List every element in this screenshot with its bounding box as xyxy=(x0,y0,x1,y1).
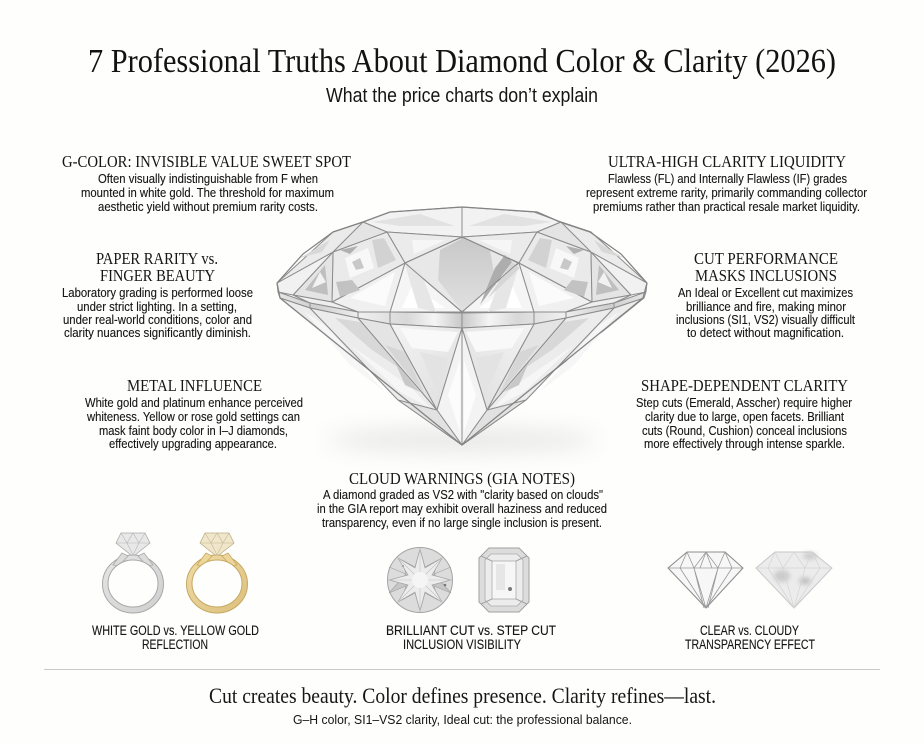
text block: cut performance: CUT PERFORMANCE xyxy=(694,249,838,268)
diamond shadow xyxy=(327,427,597,453)
text block: cut performance xyxy=(676,249,855,340)
icon: clear diamond xyxy=(668,552,743,608)
label: transparency comparison xyxy=(685,623,815,652)
text block: G-color xyxy=(62,152,351,214)
text block: cloud warnings: in the GIA report may exhibit overall haziness and reduced xyxy=(317,502,607,516)
text block: G-color: aesthetic yield without premium rarity costs. xyxy=(98,200,318,214)
text block: shape-dependent clarity: SHAPE-DEPENDENT CLARITY xyxy=(641,376,848,395)
text block: cut performance: to detect without magnification. xyxy=(687,326,844,340)
text block: ultra-high clarity: Flawless (FL) and Internally Flawless (IF) grades xyxy=(608,172,847,186)
text block: paper rarity: under real-world conditions, color and xyxy=(63,313,252,327)
label: cut comparison: BRILLIANT CUT vs. STEP CUT xyxy=(386,623,556,638)
text block: shape-dependent clarity: Step cuts (Emerald, Asscher) require higher xyxy=(636,396,852,410)
text block: ultra-high clarity: ULTRA-HIGH CLARITY LIQUIDITY xyxy=(608,152,846,171)
text block: metal influence: White gold and platinum enhance perceived xyxy=(85,396,303,410)
icon: white gold ring xyxy=(102,533,164,613)
text block: paper rarity: under strict lighting. In a setting, xyxy=(77,300,237,314)
text block: paper rarity: clarity nuances significantly diminish. xyxy=(64,326,251,340)
text block: cut performance: brilliance and fire, making minor xyxy=(686,300,846,314)
text block: G-color: mounted in white gold. The threshold for maximum xyxy=(81,186,334,200)
text block: ultra-high clarity xyxy=(586,152,867,214)
label: ring comparison: REFLECTION xyxy=(142,637,208,652)
text block: G-color: G-COLOR: INVISIBLE VALUE SWEET SPOT xyxy=(62,152,351,171)
icon: yellow gold ring xyxy=(186,533,248,613)
icon: step cut diamond xyxy=(479,548,529,612)
text block: cloud warnings xyxy=(317,469,607,530)
text block: paper rarity: PAPER RARITY vs. xyxy=(96,249,218,268)
text block: paper rarity: FINGER BEAUTY xyxy=(100,266,215,285)
text block: cloud warnings: CLOUD WARNINGS (GIA NOTES) xyxy=(349,469,575,488)
text block: metal influence: effectively upgrading appearance. xyxy=(109,437,277,451)
text block: shape-dependent clarity: cuts (Round, Cushion) conceal inclusions xyxy=(642,424,847,438)
label: transparency comparison: CLEAR vs. CLOUDY xyxy=(700,623,799,638)
text block: paper rarity xyxy=(62,249,253,340)
central diamond illustration xyxy=(277,207,647,445)
label: ring comparison xyxy=(92,623,259,652)
subtitle: What the price charts don’t explain xyxy=(326,85,598,107)
text block: ultra-high clarity: represent extreme rarity, primarily commanding collector xyxy=(586,186,867,200)
text block: cloud warnings: A diamond graded as VS2 with "clarity based on clouds" xyxy=(323,488,603,502)
text block: metal influence xyxy=(85,376,303,451)
text block: paper rarity: Laboratory grading is performed loose xyxy=(62,286,253,300)
text block: cloud warnings: transparency, even if no large single inclusion is present. xyxy=(322,516,602,530)
text block: G-color: Often visually indistinguishable from F when xyxy=(98,172,318,186)
text block: shape-dependent clarity: more effectively through intense sparkle. xyxy=(644,437,845,451)
label: cut comparison xyxy=(386,623,556,652)
text block: shape-dependent clarity xyxy=(636,376,852,451)
closing recommendation: G–H color, SI1–VS2 clarity, Ideal cut: the professional balance. xyxy=(293,712,632,727)
text block: cut performance: inclusions (SI1, VS2) visually difficult xyxy=(676,313,855,327)
icon: cloudy diamond xyxy=(756,552,832,608)
text block: cut performance: MASKS INCLUSIONS xyxy=(695,266,837,285)
text block: metal influence: mask faint body color in I–J diamonds, xyxy=(99,424,288,438)
text block: metal influence: whiteness. Yellow or rose gold settings can xyxy=(86,410,300,424)
closing statement: Cut creates beauty. Color defines presence. Clarity refines—last. xyxy=(209,683,716,708)
text block: shape-dependent clarity: clarity due to large, open facets. Brilliant xyxy=(645,410,844,424)
label: ring comparison: WHITE GOLD vs. YELLOW GOLD xyxy=(92,623,259,638)
text block: metal influence: METAL INFLUENCE xyxy=(127,376,262,395)
label: transparency comparison: TRANSPARENCY EFFECT xyxy=(685,637,815,652)
text block: ultra-high clarity: premiums rather than practical resale market liquidity. xyxy=(593,200,860,214)
label: cut comparison: INCLUSION VISIBILITY xyxy=(403,637,521,652)
text block: cut performance: An Ideal or Excellent cut maximizes xyxy=(678,286,853,300)
title: 7 Professional Truths About Diamond Color & Clarity (2026) xyxy=(88,43,836,80)
icon: brilliant cut diamond xyxy=(388,548,452,612)
